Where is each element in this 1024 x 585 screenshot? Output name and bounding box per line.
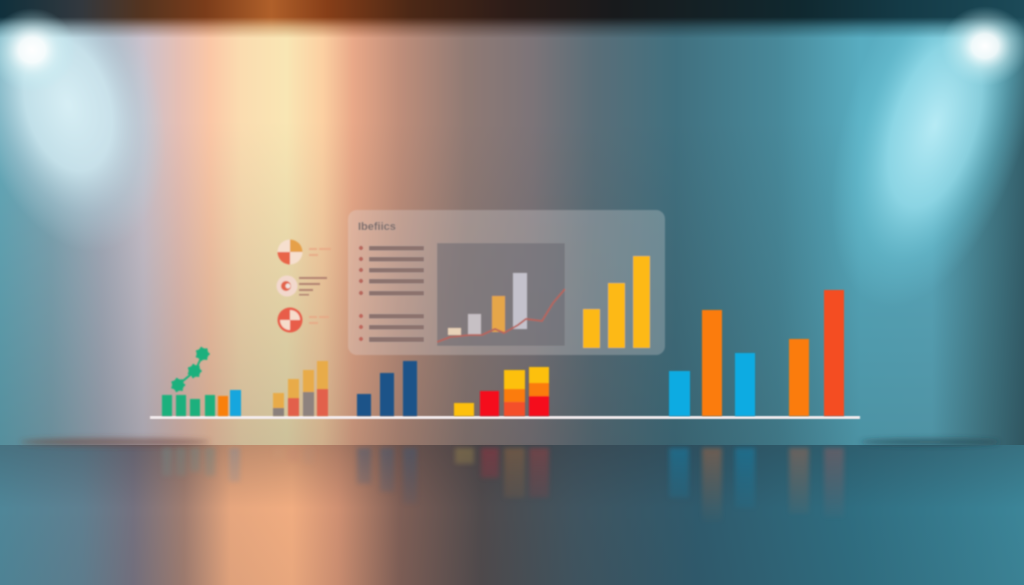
caption one: [309, 248, 331, 256]
baseline shelf: [150, 416, 860, 419]
spotlight source: right: [941, 6, 1024, 86]
navy bars chart: [357, 361, 417, 416]
icon: pie two: [278, 308, 302, 332]
text list: [359, 246, 424, 342]
yellow bars: [583, 256, 650, 348]
icon: pie one: [278, 240, 302, 264]
blue and orange bars chart: [669, 290, 844, 416]
bar charts on shelf: [162, 290, 844, 416]
stacked amber bars chart: [273, 361, 328, 416]
caption two: [299, 277, 327, 296]
floor: [0, 445, 1024, 585]
spotlight cone: right: [791, 0, 1024, 334]
inner chart: [437, 243, 565, 346]
icon: green connected nodes: [172, 348, 208, 391]
side icons with captions: [276, 240, 331, 332]
spotlight cone: left: [0, 0, 198, 275]
caption three: [309, 316, 329, 324]
green bars chart: [162, 348, 241, 416]
background wall: [0, 0, 1024, 446]
lower wall shading: [0, 0, 1024, 446]
glass dashboard panel: [348, 210, 665, 355]
red and yellow stacked chart: [454, 367, 549, 416]
dark ceiling band: [0, 0, 1024, 38]
floor edge shadow: [20, 438, 1000, 446]
panel heading: Ibefiics: [358, 221, 396, 233]
bar reflections on floor: [163, 446, 846, 514]
icon: donut: [276, 276, 298, 296]
spotlight source: left: [0, 8, 76, 92]
